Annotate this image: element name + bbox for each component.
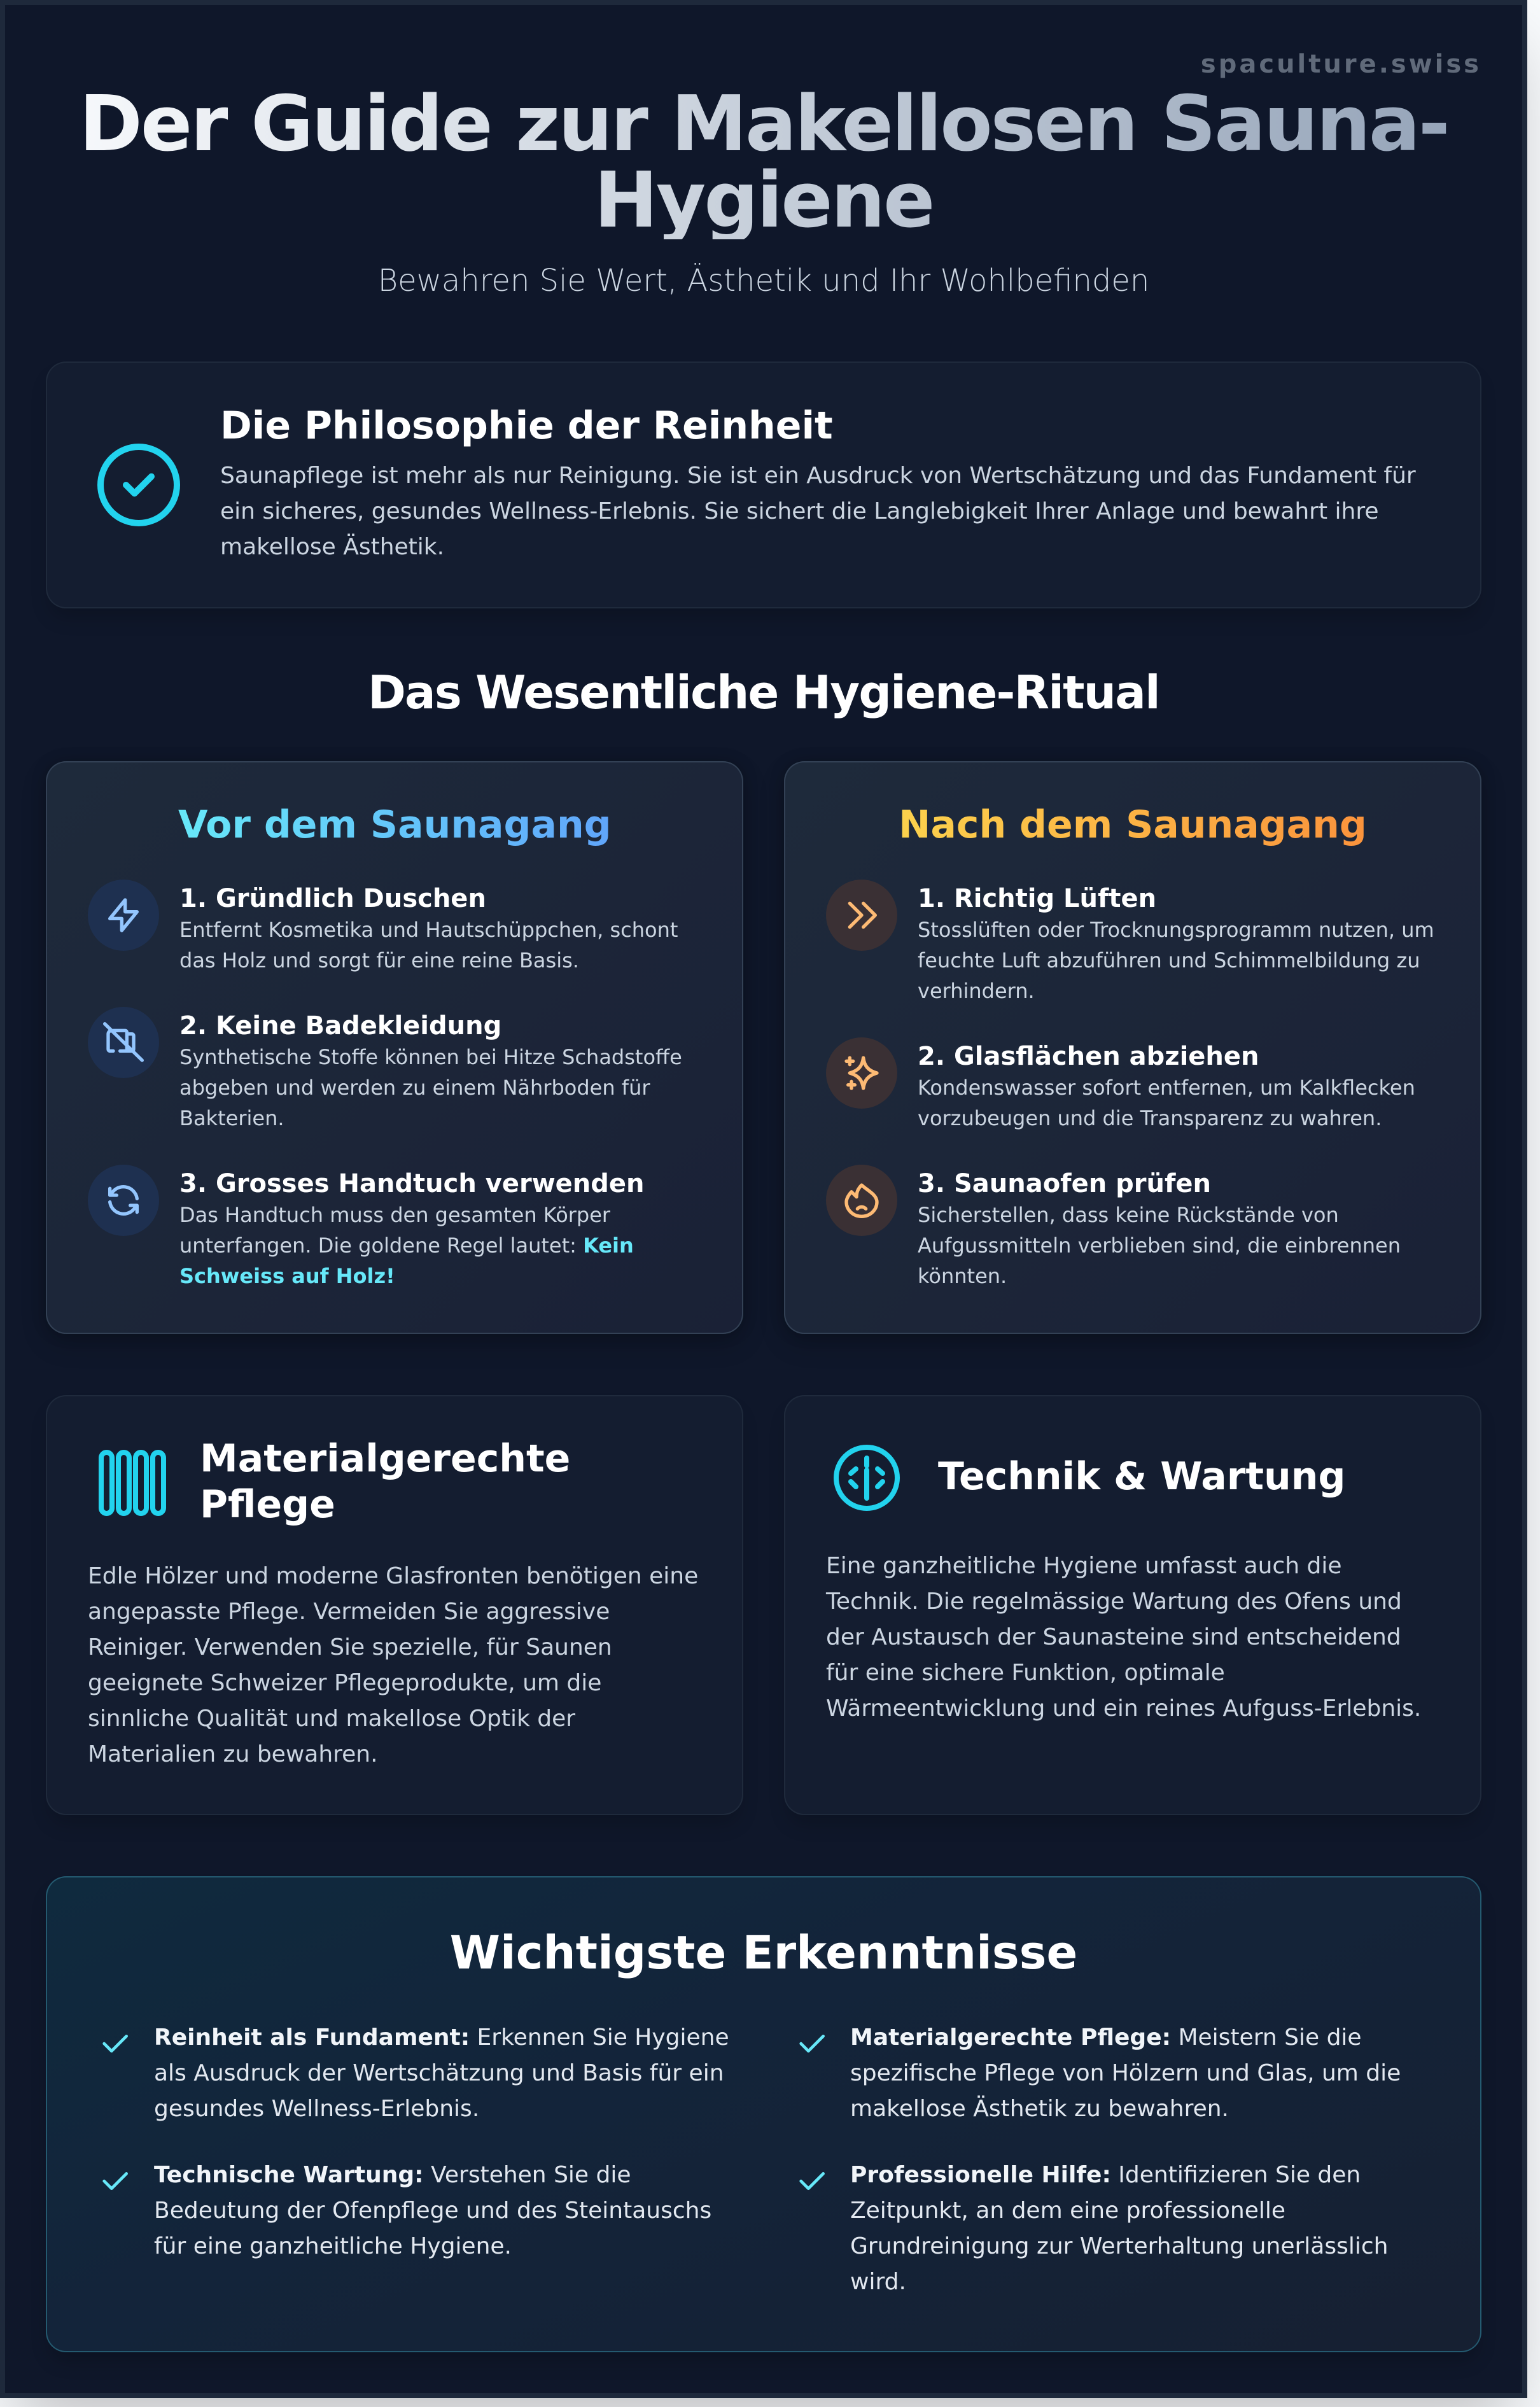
takeaway text [850,2025,1401,2122]
step text: Entfernt Kosmetika und Hautschüppchen, schont [179,918,678,942]
takeaway text: Professionelle Hilfe: Identifizieren Sie den [850,2162,1361,2188]
section heading: ritual: Das Wesentliche Hygiene-Ritual [368,666,1159,719]
takeaway text [850,2162,1388,2295]
icon: chevrons right [826,880,897,951]
step text [179,918,678,972]
takeaway text: gesundes Wellness-Erlebnis. [154,2096,479,2122]
title [46,87,1481,239]
before heading: Vor dem Saunagang [178,803,612,847]
technology heading: Technik & Wartung [938,1454,1345,1499]
step heading: 2. Glasflächen abziehen [918,1042,1259,1071]
material text: geeignete Schweizer Pflegeprodukte, um die [88,1670,601,1696]
step text: Schweiss auf Holz! [179,1264,395,1288]
icon: flame [826,1165,897,1236]
material heading: Pflege [200,1482,335,1527]
step text [918,918,1434,1003]
takeaway: professional help [799,2162,1388,2295]
material text: sinnliche Qualität und makellose Optik der [88,1706,575,1732]
step: ventilate [826,880,1434,1003]
takeaway text: Bedeutung der Ofenpflege und des Steintauschs [154,2198,711,2224]
material heading [200,1436,570,1527]
panel: material care [46,1395,743,1815]
step text: das Holz und sorgt für eine reine Basis. [179,948,579,972]
takeaway text: Grundreinigung zur Werterhaltung unerlässlich [850,2233,1388,2259]
step text: vorzubeugen und die Transparenz zu wahren. [918,1106,1382,1130]
step heading: 3. Saunaofen prüfen [918,1169,1211,1198]
takeaway text [154,2025,729,2122]
step heading: 1. Gründlich Duschen [179,884,486,913]
step text: Synthetische Stoffe können bei Hitze Schadstoffe [179,1045,682,1069]
takeaway: maintenance [102,2162,711,2259]
after heading: Nach dem Saunagang [899,803,1367,847]
technology text: Wärmeentwicklung und ein reines Aufguss-Erlebnis. [826,1695,1421,1722]
step text: Stosslüften oder Trocknungsprogramm nutzen, um [918,918,1434,942]
takeaway text: makellose Ästhetik zu bewahren. [850,2096,1229,2122]
icon: refresh [88,1165,159,1236]
material heading: Materialgerechte [200,1436,570,1481]
technology text: Eine ganzheitliche Hygiene umfasst auch die [826,1553,1341,1579]
icon: gauge circle [834,1445,900,1511]
takeaways heading: Wichtigste Erkenntnisse [450,1926,1077,1979]
panel: before sauna [46,761,743,1334]
material text: Reiniger. Verwenden Sie spezielle, für Saunen [88,1634,612,1660]
takeaway text: als Ausdruck der Wertschätzung und Basis für ein [154,2060,724,2086]
icon: radiator [99,1450,166,1516]
material text: Materialien zu bewahren. [88,1741,378,1767]
step text: Das Handtuch muss den gesamten Körper [179,1203,610,1227]
step heading: 3. Grosses Handtuch verwenden [179,1169,644,1198]
takeaway text: spezifische Pflege von Hölzern und Glas, um die [850,2060,1401,2086]
step: towel [88,1165,644,1288]
step text [179,1045,682,1130]
technology text: Technik. Die regelmässige Wartung des Ofens und [826,1589,1402,1615]
title: Hygiene [594,157,933,245]
technology text: für eine sichere Funktion, optimale [826,1660,1225,1686]
step: oven [826,1165,1401,1288]
brand label: spaculture.swiss [1201,50,1481,79]
icon: sparkles [826,1037,897,1109]
step text: verhindern. [918,979,1035,1003]
technology text: der Austausch der Saunasteine sind entscheidend [826,1624,1401,1650]
philosophy heading: Die Philosophie der Reinheit [220,404,833,448]
material text [88,1563,698,1767]
subtitle: Bewahren Sie Wert, Ästhetik und Ihr Wohlbefinden [378,263,1149,298]
icon: check [799,2172,825,2190]
step: shower [88,880,678,972]
step: glass [826,1037,1415,1130]
step text: könnten. [918,1264,1007,1288]
takeaway text: Materialgerechte Pflege: Meistern Sie die [850,2025,1362,2051]
icon: bolt [88,880,159,951]
takeaway text: Zeitpunkt, an dem eine professionelle [850,2198,1285,2224]
step text [179,1203,634,1288]
panel: key takeaways [46,1876,1481,2352]
icon: check [799,2035,825,2053]
icon: check [102,2035,128,2053]
takeaway text: wird. [850,2269,906,2295]
step heading: 2. Keine Badekleidung [179,1011,501,1041]
step heading: 1. Richtig Lüften [918,884,1156,913]
title: Der Guide zur Makellosen Sauna- [79,80,1448,169]
panel: technology [784,1395,1481,1815]
step text [918,1076,1415,1130]
step text: Sicherstellen, dass keine Rückstände von [918,1203,1339,1227]
step text: abgeben und werden zu einem Nährboden für [179,1076,650,1100]
icon: check [102,2172,128,2190]
step text: Bakterien. [179,1106,284,1130]
icon: crossed out clothing [88,1007,159,1078]
takeaway: material [799,2025,1401,2122]
philosophy text [220,463,1416,560]
takeaway: purity [102,2025,729,2122]
takeaway text: Reinheit als Fundament: Erkennen Sie Hygiene [154,2025,729,2051]
philosophy text: Saunapflege ist mehr als nur Reinigung. Sie ist ein Ausdruck von Wertschätzung und das Fundament für [220,463,1416,489]
material text: Edle Hölzer und moderne Glasfronten benötigen eine [88,1563,698,1589]
takeaway text [154,2162,711,2259]
step text: Aufgussmitteln verblieben sind, die einbrennen [918,1233,1401,1258]
takeaway text: für eine ganzheitliche Hygiene. [154,2233,512,2259]
material text: angepasste Pflege. Vermeiden Sie aggressive [88,1599,610,1625]
step text [918,1203,1401,1288]
takeaway text: Technische Wartung: Verstehen Sie die [154,2162,631,2188]
step text: feuchte Luft abzuführen und Schimmelbildung zu [918,948,1420,972]
step: no swimwear [88,1007,682,1130]
icon: check circle [97,444,180,526]
philosophy text: makellose Ästhetik. [220,534,444,560]
philosophy text: ein sicheres, gesundes Wellness-Erlebnis. Sie sichert die Langlebigkeit Ihrer Anlage und bewahrt ihre [220,498,1378,524]
panel: philosophy [46,361,1481,608]
step text: Kondenswasser sofort entfernen, um Kalkflecken [918,1076,1415,1100]
technology text [826,1553,1421,1722]
step text: unterfangen. Die goldene Regel lautet: Kein [179,1233,634,1258]
panel: after sauna [784,761,1481,1334]
